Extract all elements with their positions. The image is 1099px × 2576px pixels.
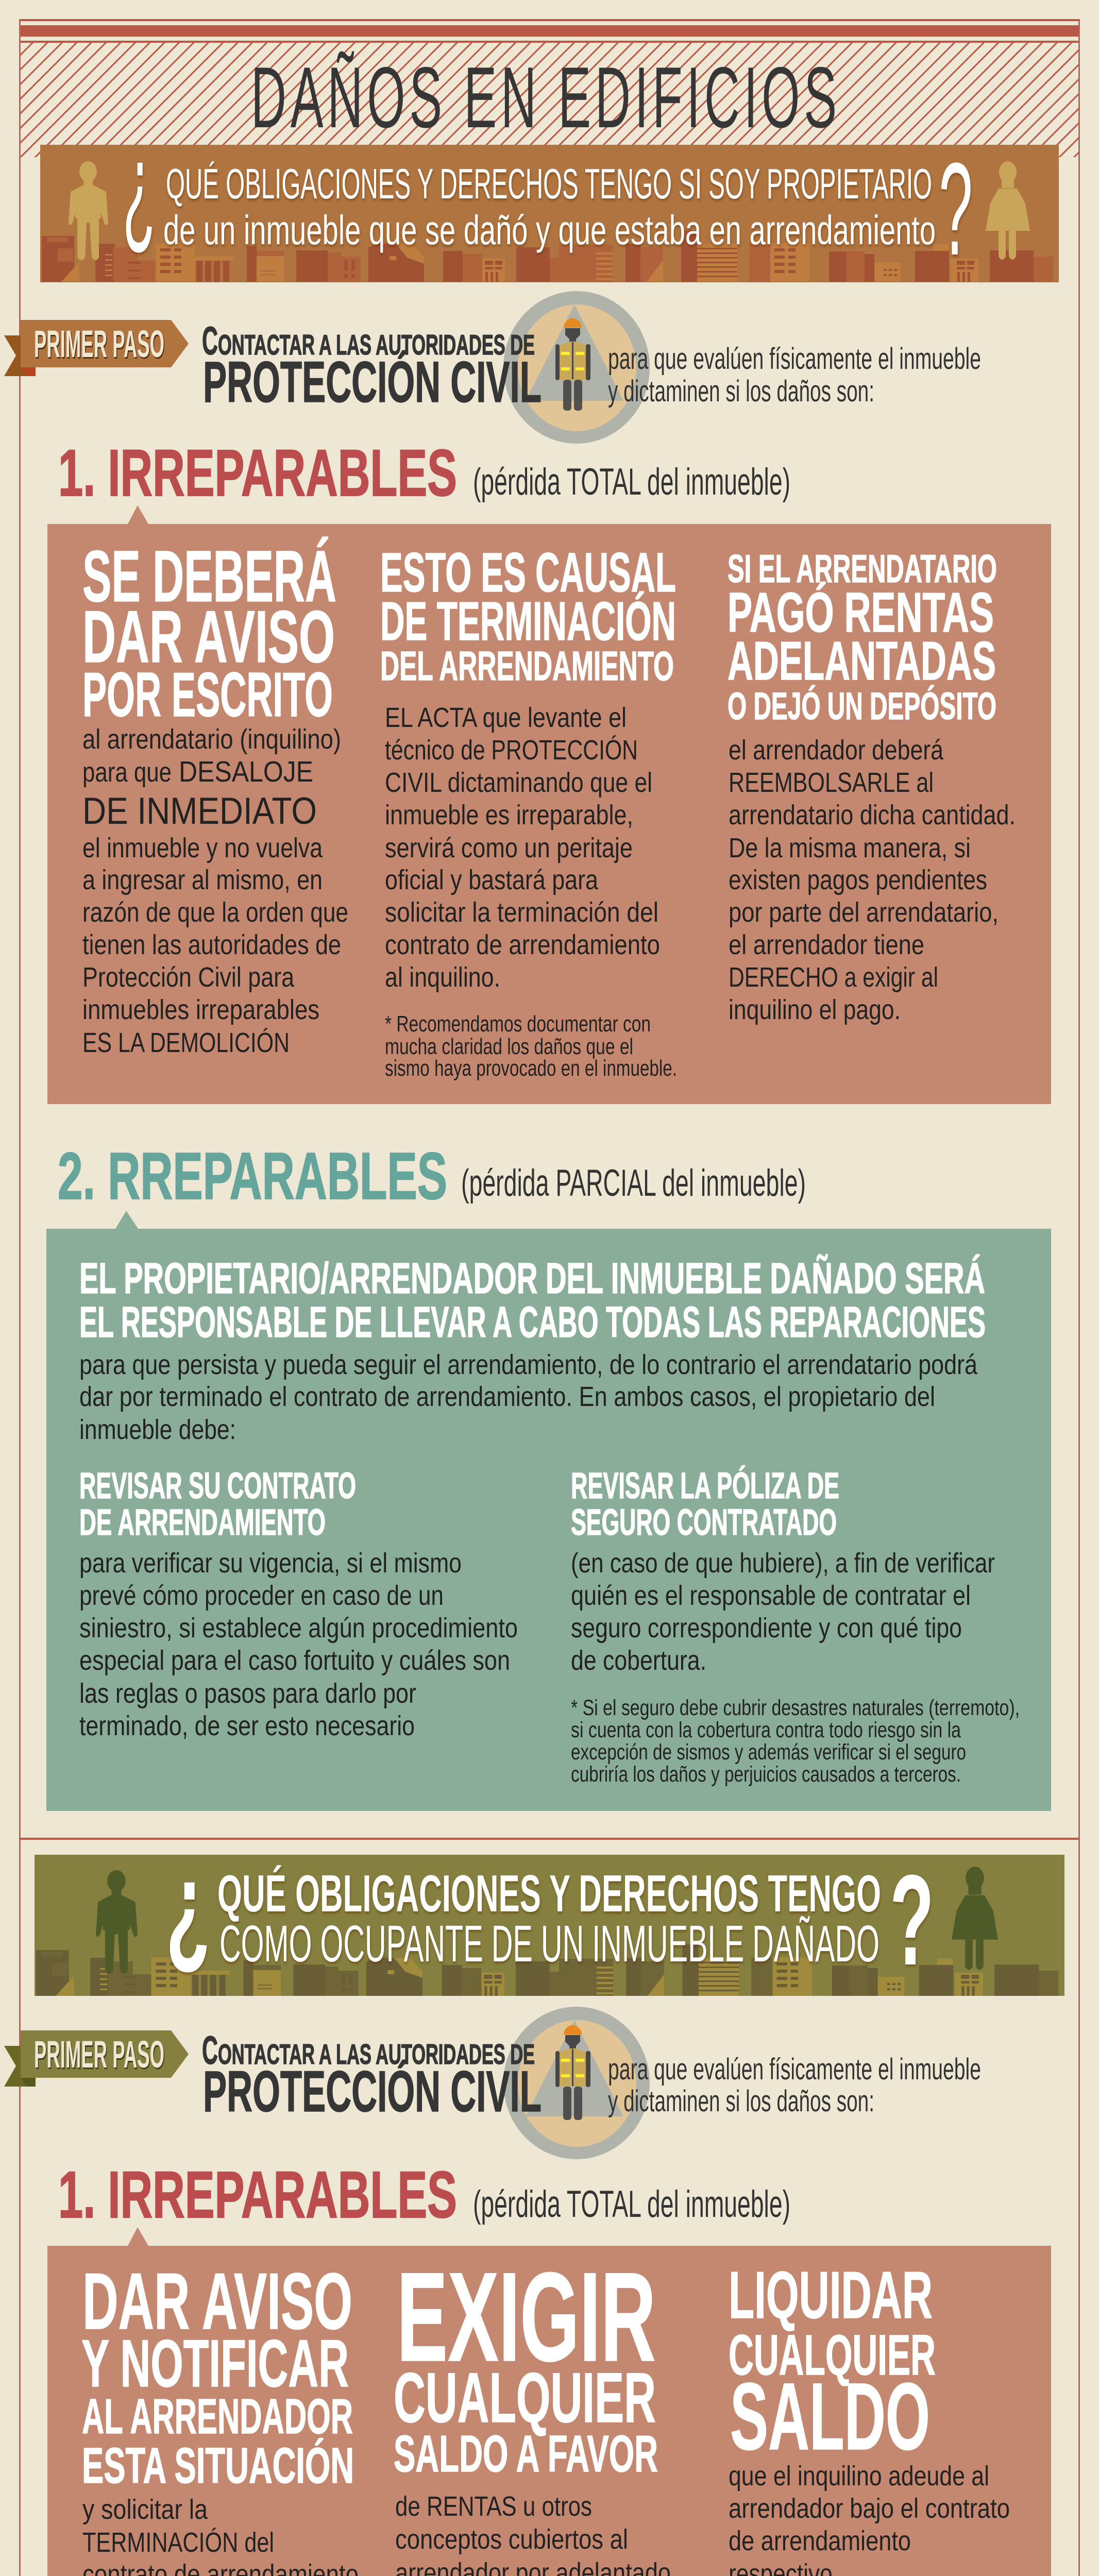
contact description: y dictaminen si los daños son: xyxy=(608,375,874,408)
column: revisar poliza: si cuenta con la cobertura contra todo riesgo sin la xyxy=(571,1718,961,1742)
column: rentas adelantadas: arrendatario dicha cantidad. xyxy=(729,800,1016,831)
column: rentas adelantadas: el arrendador tiene xyxy=(729,929,924,960)
icon: woman silhouette xyxy=(952,1867,998,1970)
column: dar aviso: ES LA DEMOLICIÓN xyxy=(82,1027,290,1058)
column: causal de terminacion: CIVIL dictaminando que el xyxy=(385,767,652,798)
column: causal de terminacion xyxy=(380,541,677,1081)
column: liquidar saldo: de arrendamiento xyxy=(729,2526,911,2556)
column: liquidar saldo: LIQUIDAR xyxy=(729,2258,933,2332)
column: revisar poliza: (en caso de que hubiere), a fin de verificar xyxy=(571,1548,995,1579)
column: rentas adelantadas: el arrendador deberá xyxy=(729,735,944,766)
column: revisar contrato xyxy=(79,1466,518,1741)
column: dar aviso y notificar: y solicitar la xyxy=(82,2494,208,2525)
contact heading: C xyxy=(202,2028,218,2073)
contact heading: ONTACTAR A LAS AUTORIDADES DE xyxy=(218,329,535,361)
column: dar aviso: al arrendatario (inquilino) xyxy=(82,724,341,755)
column: causal de terminacion: al inquilino. xyxy=(385,962,500,993)
icon: civil protection worker xyxy=(503,2007,650,2159)
column: liquidar saldo: CUALQUIER xyxy=(729,2324,936,2387)
column: exigir saldo xyxy=(394,2246,671,2576)
column: causal de terminacion: inmueble es irreparable, xyxy=(385,800,633,831)
column: revisar poliza: SEGURO CONTRATADO xyxy=(571,1502,837,1543)
column: dar aviso y notificar: AL ARRENDADOR xyxy=(82,2389,353,2444)
contact heading: ONTACTAR A LAS AUTORIDADES DE xyxy=(218,2038,535,2070)
column: rentas adelantadas: REEMBOLSARLE al xyxy=(729,767,934,798)
column: rentas adelantadas xyxy=(728,547,1016,1025)
column: revisar poliza: de cobertura. xyxy=(571,1645,706,1676)
column: dar aviso y notificar: Y NOTIFICAR xyxy=(81,2326,349,2401)
column: causal de terminacion: servirá como un peritaje xyxy=(385,833,633,863)
column: rentas adelantadas: DERECHO a exigir al xyxy=(729,962,938,993)
column: revisar poliza: quién es el responsable de contratar el xyxy=(571,1580,971,1611)
contact description: y dictaminen si los daños son: xyxy=(608,2084,874,2118)
column: causal de terminacion: EL ACTA que levante el xyxy=(385,702,627,733)
contact heading xyxy=(202,2028,542,2124)
column: revisar contrato: siniestro, si establece algún procedimiento xyxy=(79,1613,518,1643)
column: rentas adelantadas: existen pagos pendientes xyxy=(729,865,987,895)
first step row: occupant xyxy=(4,2007,981,2159)
column: causal de terminacion: contrato de arrendamiento xyxy=(385,929,660,960)
icon: man silhouette xyxy=(69,161,108,260)
column: dar aviso: tienen las autoridades de xyxy=(82,929,341,960)
column: revisar poliza: cubriría los daños y perjuicios causados a terceros. xyxy=(571,1762,961,1787)
column: dar aviso: inmuebles irreparables xyxy=(82,994,319,1025)
owner question text: ¿ xyxy=(123,114,156,258)
column: causal de terminacion: DE TERMINACIÓN xyxy=(380,591,676,652)
panel: irreparables owner xyxy=(47,505,1051,1104)
icon: civil protection worker xyxy=(503,291,650,444)
contact description xyxy=(608,342,981,408)
column: exigir saldo: EXIGIR xyxy=(397,2246,656,2388)
section divider xyxy=(19,1838,1080,1840)
banner: owner question xyxy=(40,114,1059,283)
city skyline xyxy=(36,1944,1058,1996)
column: dar aviso y notificar xyxy=(81,2257,359,2576)
column: exigir saldo: CUALQUIER xyxy=(394,2359,656,2437)
column: revisar poliza: seguro correspondiente y con qué tipo xyxy=(571,1613,962,1643)
column: revisar contrato: REVISAR SU CONTRATO xyxy=(79,1466,356,1506)
column: causal de terminacion: sismo haya provocado en el inmueble. xyxy=(385,1056,677,1081)
column: causal de terminacion: ESTO ES CAUSAL xyxy=(380,541,676,603)
banner: occupant question xyxy=(35,1834,1064,1996)
panel: reparables owner xyxy=(46,1211,1051,1811)
intro text: inmueble debe: xyxy=(79,1414,236,1445)
column: revisar poliza xyxy=(571,1466,1020,1787)
column: revisar contrato: especial para el caso fortuito y cuáles son xyxy=(79,1645,510,1676)
column: dar aviso: DE INMEDIATO xyxy=(82,790,317,832)
column: revisar contrato: para verificar su vigencia, si el mismo xyxy=(79,1548,462,1579)
column: dar aviso: SE DEBERÁ xyxy=(82,535,336,617)
heading: 1 irreparables: 1. IRREPARABLES xyxy=(58,436,457,510)
column: revisar poliza: excepción de sismos y además verificar si el seguro xyxy=(571,1740,966,1765)
column: rentas adelantadas: inquilino el pago. xyxy=(729,994,901,1025)
ribbon: primer paso: PRIMER PASO xyxy=(34,323,164,365)
ribbon: primer paso xyxy=(4,320,189,376)
column: dar aviso: para que xyxy=(82,757,172,788)
column: rentas adelantadas: por parte del arrendatario, xyxy=(729,897,999,928)
heading: responsable de reparaciones xyxy=(79,1254,986,1346)
column: revisar contrato: DE ARRENDAMIENTO xyxy=(79,1502,326,1543)
column: liquidar saldo: arrendador bajo el contrato xyxy=(729,2493,1010,2524)
column: dar aviso: DESALOJE xyxy=(179,755,313,788)
column: revisar contrato: prevé cómo proceder en caso de un xyxy=(79,1580,444,1611)
owner question text xyxy=(123,114,973,283)
column: causal de terminacion: solicitar la terminación del xyxy=(385,897,658,928)
column: revisar poliza: REVISAR LA PÓLIZA DE xyxy=(571,1466,839,1506)
heading: 1 irreparables occupant: 1. IRREPARABLES xyxy=(58,2158,457,2232)
column: liquidar saldo xyxy=(729,2258,1010,2576)
column: causal de terminacion: * Recomendamos documentar con xyxy=(385,1011,651,1037)
column: exigir saldo: de RENTAS u otros xyxy=(395,2491,592,2522)
banner: owner question: ? xyxy=(939,135,973,283)
column: causal de terminacion: DEL ARRENDAMIENTO xyxy=(380,643,674,689)
panel: irreparables occupant xyxy=(47,2227,1051,2576)
column: dar aviso: el inmueble y no vuelva xyxy=(82,833,323,863)
column: causal de terminacion: oficial y bastará para xyxy=(385,865,599,895)
heading: 1 irreparables: (pérdida TOTAL del inmueble) xyxy=(473,461,790,503)
intro text xyxy=(79,1349,978,1445)
contact heading: PROTECCIÓN CIVIL xyxy=(203,350,542,414)
column: revisar contrato: terminado, de ser esto necesario xyxy=(79,1710,415,1741)
column: dar aviso y notificar: TERMINACIÓN del xyxy=(82,2527,274,2558)
occupant question text xyxy=(166,1834,934,1992)
column: dar aviso xyxy=(82,535,348,1058)
occupant question text: ¿ xyxy=(166,1834,210,1978)
occupant question text: ? xyxy=(890,1848,934,1992)
column: dar aviso: a ingresar al mismo, en xyxy=(82,865,323,895)
column: dar aviso: DAR AVISO xyxy=(82,596,335,678)
column: causal de terminacion: mucha claridad los daños que el xyxy=(385,1034,633,1059)
column: dar aviso: Protección Civil para xyxy=(82,962,295,993)
ribbon: primer paso xyxy=(4,2030,189,2087)
heading: 2 reparables: (pérdida PARCIAL del inmueble) xyxy=(461,1162,806,1204)
first step row: owner xyxy=(4,291,981,444)
icon: woman silhouette xyxy=(986,161,1030,260)
column: liquidar saldo: que el inquilino adeude al xyxy=(729,2461,989,2492)
column: exigir saldo: conceptos cubiertos al xyxy=(395,2524,628,2555)
heading: 2 reparables: 2. RREPARABLES xyxy=(58,1139,447,1213)
column: exigir saldo: SALDO A FAVOR xyxy=(394,2425,658,2483)
contact heading: C xyxy=(202,319,218,363)
contact heading: PROTECCIÓN CIVIL xyxy=(203,2059,542,2124)
top red bar xyxy=(21,25,1079,37)
column: rentas adelantadas: De la misma manera, si xyxy=(729,833,971,863)
contact description xyxy=(608,2053,981,2118)
intro text: dar por terminado el contrato de arrendamiento. En ambos casos, el propietario del xyxy=(79,1381,935,1412)
city skyline xyxy=(42,230,1053,282)
contact heading xyxy=(202,319,542,414)
column: dar aviso y notificar: ESTA SITUACIÓN xyxy=(82,2437,354,2494)
ribbon: primer paso: PRIMER PASO xyxy=(34,2033,164,2076)
column: liquidar saldo: SALDO xyxy=(730,2364,930,2470)
column: revisar contrato: las reglas o pasos para darlo por xyxy=(79,1678,416,1709)
column: causal de terminacion: técnico de PROTECCIÓN xyxy=(385,735,638,766)
hatched header background xyxy=(21,43,1079,157)
icon: man silhouette xyxy=(96,1870,138,1974)
column: dar aviso: POR ESCRITO xyxy=(82,659,333,730)
heading: 1 irreparables occupant: (pérdida TOTAL del inmueble) xyxy=(473,2183,790,2225)
column: dar aviso y notificar: DAR AVISO xyxy=(82,2257,352,2346)
column: dar aviso: razón de que la orden que xyxy=(82,897,348,928)
